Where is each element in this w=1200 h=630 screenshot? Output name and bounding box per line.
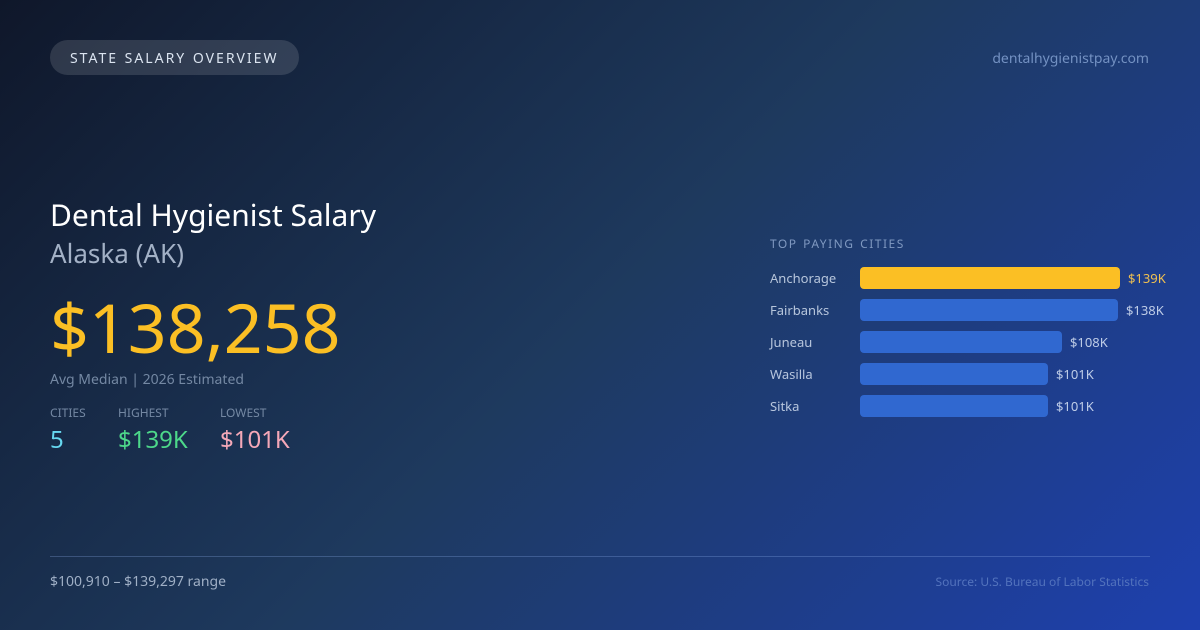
- stat: highest: HIGHEST: [118, 404, 169, 421]
- stat: lowest: [220, 404, 290, 456]
- row: Sitka: Sitka: [770, 397, 799, 415]
- row: Anchorage: [770, 267, 1166, 289]
- row: Wasilla: [770, 363, 1094, 385]
- row: Juneau: Juneau: [770, 333, 812, 351]
- salary caption: Avg Median | 2026 Estimated: [50, 370, 244, 389]
- stat: cities: CITIES: [50, 404, 86, 421]
- row: Sitka: $101K: [1056, 397, 1094, 415]
- row: Juneau: $108K: [1070, 333, 1108, 351]
- stat: highest: $139K: [118, 423, 188, 456]
- chart heading: TOP PAYING CITIES: [770, 235, 905, 252]
- bar chart: top paying cities: [769, 235, 1166, 417]
- source: Source: U.S. Bureau of Labor Statistics: [936, 573, 1149, 590]
- site url: dentalhygienistpay.com: [992, 49, 1149, 68]
- row: Wasilla: Wasilla: [770, 365, 813, 383]
- badge: state salary overview: STATE SALARY OVERVIEW: [70, 49, 278, 68]
- stat: lowest: $101K: [220, 423, 290, 456]
- stat: highest: [118, 404, 188, 456]
- stat: lowest: LOWEST: [220, 404, 266, 421]
- badge: state salary overview: [50, 40, 299, 75]
- title: Dental Hygienist Salary: [50, 194, 376, 235]
- row: Anchorage: Anchorage: [770, 269, 836, 287]
- row: Juneau: [769, 331, 1108, 353]
- main salary figure: $138,258: [50, 280, 340, 373]
- stat: cities: [50, 404, 86, 456]
- row: Wasilla: $101K: [1056, 365, 1094, 383]
- row: Fairbanks: [770, 299, 1164, 321]
- row: Anchorage: $139K: [1128, 269, 1166, 287]
- subtitle: state: Alaska (AK): [50, 235, 184, 271]
- row: Fairbanks: $138K: [1126, 301, 1164, 319]
- row: Sitka: [770, 395, 1094, 417]
- row: Fairbanks: Fairbanks: [770, 301, 829, 319]
- stat: cities: 5: [50, 423, 64, 456]
- salary range: $100,910 – $139,297 range: [50, 572, 226, 591]
